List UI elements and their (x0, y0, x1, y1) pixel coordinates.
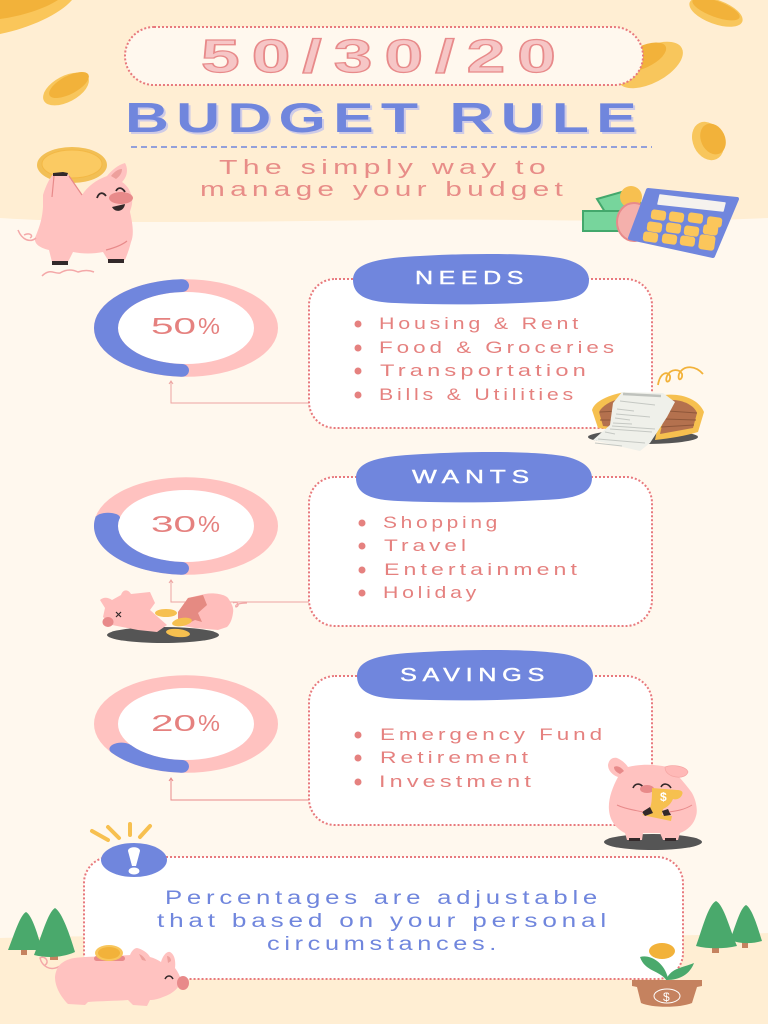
connector: savings (169, 778, 309, 800)
icon: pig holding trophy: $ (660, 790, 667, 804)
panel: savings (309, 650, 652, 825)
list: savings: Investment (379, 772, 535, 791)
list: needs: Food & Groceries (379, 338, 618, 357)
callout text: Percentages are adjustable (165, 888, 602, 909)
list: savings: Retirement (380, 748, 532, 767)
icon: broken piggy bank (100, 590, 247, 643)
list: savings (354, 725, 606, 791)
panel: wants (309, 452, 652, 626)
pill heading: wants (356, 452, 592, 502)
icon: pig holding trophy (604, 758, 702, 850)
list: needs (354, 314, 618, 404)
subtitle (200, 157, 568, 201)
list: savings: Emergency Fund (380, 725, 606, 744)
icon: calculator with cash (583, 186, 737, 256)
list: wants: Entertainment (384, 560, 581, 579)
pill heading: savings: SAVINGS (400, 665, 550, 685)
icon: money plant pot (632, 943, 702, 1007)
title: 50/30/20: 50/30/20 (201, 30, 568, 82)
list: wants: Holiday (383, 583, 480, 602)
decorative coins (0, 0, 746, 165)
donut chart: 20%: 20 (151, 710, 196, 736)
icon: money plant pot: $ (663, 990, 670, 1004)
icon: left trees (8, 908, 75, 960)
pill heading: needs (353, 254, 589, 304)
icon: pig holding coin (18, 147, 133, 276)
heading: budget rule: BUDGET RULE (127, 96, 646, 143)
donut chart: 30%: % (198, 511, 220, 537)
list: wants: Shopping (383, 513, 501, 532)
panel: needs (309, 254, 652, 428)
heading: budget rule: BUDGET RULE (125, 94, 644, 141)
callout text (157, 888, 611, 955)
icon: exclamation badge (92, 824, 167, 877)
list: needs: Housing & Rent (379, 314, 582, 333)
list: needs: Bills & Utilities (379, 385, 577, 404)
donut chart: 50%: % (198, 313, 220, 339)
donut chart: 50%: 50 (151, 313, 196, 339)
donut chart: 30% (96, 484, 266, 575)
pill heading: needs: NEEDS (415, 268, 529, 288)
list: wants (358, 513, 581, 602)
bottom cream band (0, 933, 768, 1024)
pill heading: savings (357, 650, 593, 700)
top cream band (0, 0, 768, 222)
callout text: that based on your personal (157, 911, 611, 932)
subtitle: The simply way to (219, 157, 551, 179)
donut chart: 50% (106, 279, 266, 377)
pill heading: wants: WANTS (412, 467, 535, 487)
connector: wants (169, 580, 309, 602)
donut chart: 30%: 30 (151, 511, 196, 537)
icon: piggy bank with coin (40, 945, 189, 1006)
list: wants: Travel (384, 536, 470, 555)
subtitle: manage your budget (200, 179, 568, 201)
heading: budget rule (125, 94, 646, 143)
callout text: circumstances. (267, 934, 501, 955)
donut chart: 20% (106, 682, 266, 773)
callout: percentages note (84, 857, 683, 979)
list: needs: Transportation (380, 361, 590, 380)
title badge (125, 27, 643, 85)
connector: needs (169, 381, 309, 403)
donut chart: 20%: % (198, 710, 220, 736)
icon: treasure chest with receipt (588, 367, 704, 451)
icon: right trees (696, 901, 762, 953)
